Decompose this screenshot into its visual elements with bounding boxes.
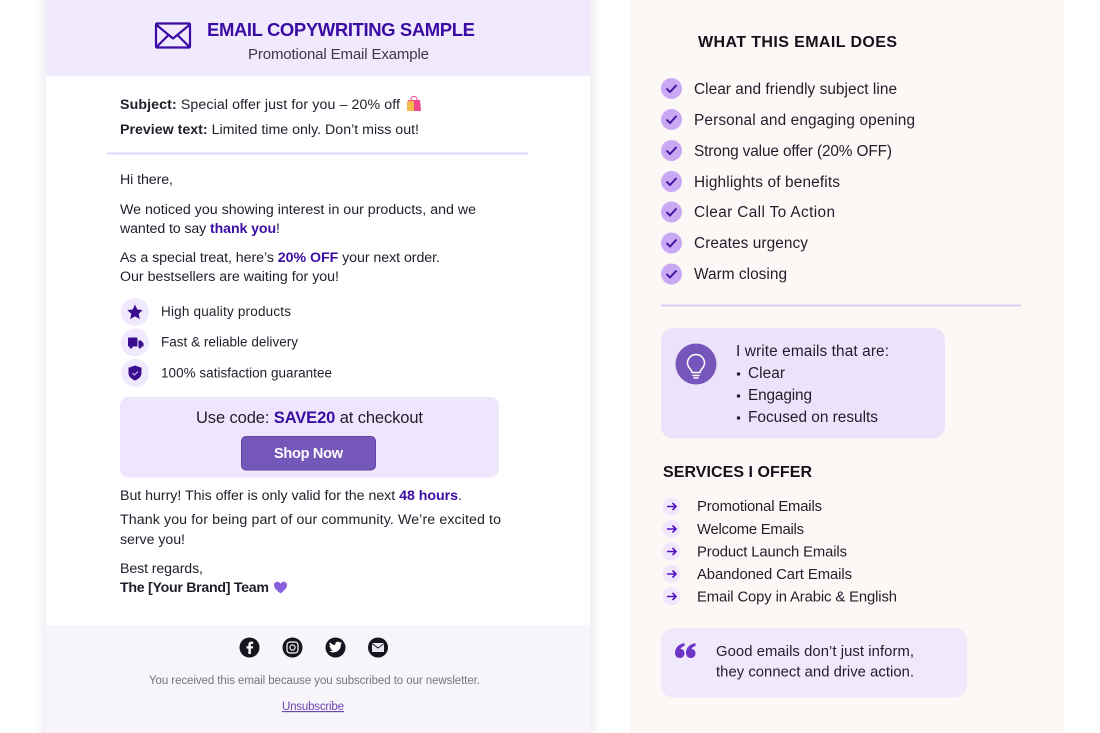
unsubscribe link: Unsubscribe bbox=[282, 701, 344, 713]
benefits list bbox=[121, 298, 332, 387]
promo code box: Use code: SAVE20 at checkout bbox=[196, 409, 423, 427]
icon: instagram bbox=[282, 638, 302, 658]
button: shop now: Shop Now bbox=[274, 446, 344, 462]
benefits list: High quality products bbox=[161, 304, 291, 319]
icon: quote mark bbox=[675, 643, 696, 658]
email body copy: We noticed you showing interest in our products, and we bbox=[120, 202, 476, 218]
closing copy bbox=[120, 488, 501, 596]
closing copy: serve you! bbox=[120, 532, 185, 548]
icon: shield bbox=[128, 366, 142, 380]
icon: facebook bbox=[240, 638, 260, 658]
icon: light bulb bbox=[676, 344, 716, 384]
email footer: You received this email because you subscribed to our newsletter. bbox=[149, 675, 480, 687]
heading: services: SERVICES I OFFER bbox=[663, 464, 812, 481]
quote box bbox=[661, 628, 967, 698]
icon: star bbox=[127, 304, 143, 319]
heading: WHAT THIS EMAIL DOES bbox=[698, 34, 897, 51]
quote box: Good emails don’t just inform, bbox=[716, 644, 914, 660]
services list: Abandoned Cart Emails bbox=[697, 567, 852, 583]
panel: email card bbox=[44, 0, 592, 733]
checklist: Clear and friendly subject line bbox=[694, 81, 897, 98]
email body copy: Hi there, bbox=[120, 172, 173, 188]
icon: heart bbox=[274, 582, 287, 594]
callout: I write emails: I write emails that are: bbox=[736, 343, 889, 360]
benefits list: Fast & reliable delivery bbox=[161, 334, 298, 350]
icon: twitter bbox=[326, 638, 346, 658]
closing copy: But hurry! This offer is only valid for the next 48 hours. bbox=[120, 488, 462, 504]
callout: I write emails bbox=[661, 328, 945, 438]
benefits list: 100% satisfaction guarantee bbox=[161, 366, 332, 380]
email header bbox=[46, 0, 590, 76]
promo code box bbox=[120, 397, 499, 478]
icon: mail bbox=[368, 638, 388, 658]
email body copy: Our bestsellers are waiting for you! bbox=[120, 269, 339, 285]
email footer bbox=[46, 625, 590, 733]
panel: right sidebar background bbox=[630, 0, 1064, 733]
callout: I write emails: Clear bbox=[748, 365, 785, 382]
title: EMAIL COPYWRITING SAMPLE bbox=[207, 19, 475, 40]
closing copy: The [Your Brand] Team bbox=[120, 580, 269, 596]
checklist: Personal and engaging opening bbox=[694, 112, 915, 129]
panel: what this email does bbox=[661, 34, 1021, 698]
services list: Email Copy in Arabic & English bbox=[697, 590, 897, 606]
checklist: Highlights of benefits bbox=[694, 174, 840, 191]
button: shop now bbox=[242, 436, 376, 470]
checklist: Creates urgency bbox=[694, 235, 808, 252]
preview text: Preview text: Limited time only. Don’t miss out! bbox=[120, 122, 419, 138]
services list: Product Launch Emails bbox=[697, 544, 847, 560]
services list: Welcome Emails bbox=[697, 522, 804, 538]
closing copy: Thank you for being part of our community. We’re excited to bbox=[120, 512, 501, 528]
email body copy: wanted to say thank you! bbox=[119, 221, 280, 237]
subtitle: Promotional Email Example bbox=[248, 46, 429, 63]
email body copy: As a special treat, here’s 20% OFF your next order. bbox=[120, 250, 440, 266]
closing copy: Best regards, bbox=[120, 561, 203, 577]
checklist: Strong value offer (20% OFF) bbox=[694, 143, 892, 160]
services list: Promotional Emails bbox=[697, 499, 822, 515]
quote box: they connect and drive action. bbox=[716, 664, 914, 680]
checklist bbox=[661, 78, 915, 284]
icon: shopping bag bbox=[407, 96, 421, 111]
checklist: Warm closing bbox=[694, 266, 787, 283]
subject line: Subject: Special offer just for you – 20% off bbox=[120, 97, 400, 113]
email body copy bbox=[119, 172, 476, 285]
callout: I write emails: Engaging bbox=[748, 387, 812, 404]
services list bbox=[662, 498, 897, 606]
icon: truck bbox=[128, 338, 144, 348]
checklist: Clear Call To Action bbox=[694, 204, 835, 221]
icon: envelope bbox=[156, 24, 190, 48]
callout: I write emails: Focused on results bbox=[748, 409, 878, 426]
